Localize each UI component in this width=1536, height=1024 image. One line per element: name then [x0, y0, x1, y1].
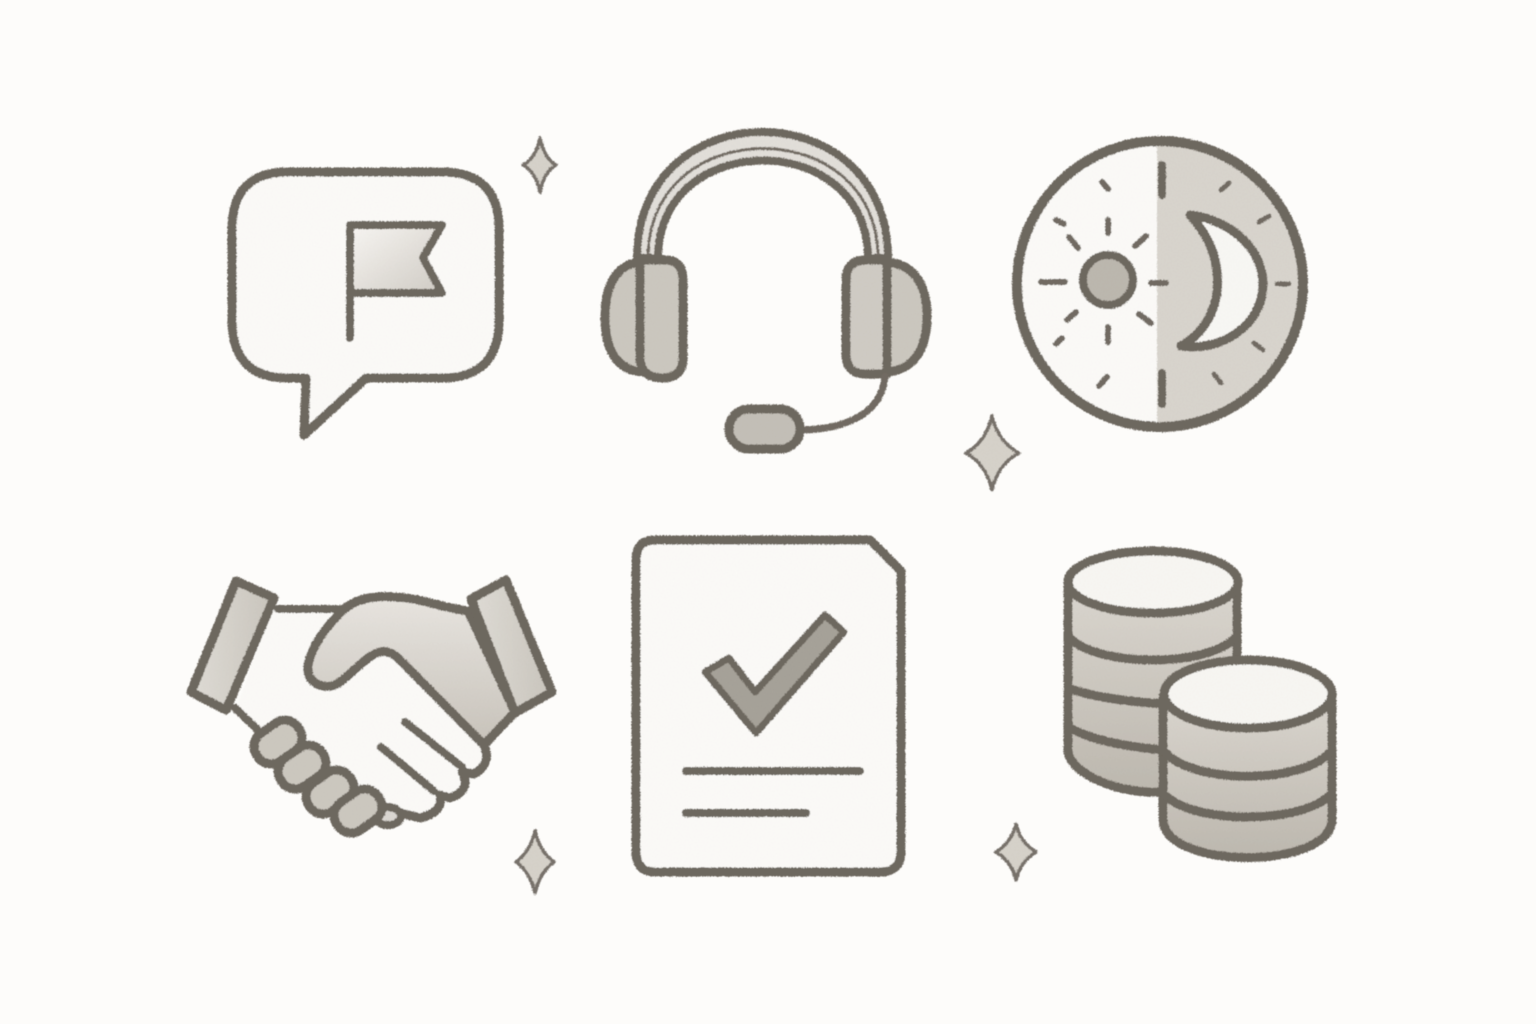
white fingers — [396, 742, 486, 818]
moon rays — [1214, 183, 1289, 383]
sun — [1041, 182, 1166, 386]
icon: sparkle top left — [523, 138, 556, 192]
mic boom — [804, 376, 885, 430]
checkmark — [705, 615, 844, 733]
right ear cup — [846, 260, 927, 374]
icon: speech bubble with flag — [232, 172, 499, 435]
icon: document with checkmark — [636, 540, 901, 872]
flag — [350, 225, 442, 338]
icon: headset — [605, 132, 927, 449]
text lines — [686, 771, 860, 813]
left stack — [1068, 551, 1238, 792]
icon: stacked coins — [1068, 551, 1332, 858]
fingers — [248, 714, 401, 839]
icon: sparkle bottom right — [996, 824, 1036, 880]
icon: day and night clock — [1017, 141, 1303, 427]
icon: sparkle center right — [966, 416, 1019, 490]
microphone — [729, 409, 800, 449]
left ear cup — [605, 260, 683, 378]
moon — [1181, 215, 1263, 347]
gray hand — [308, 597, 515, 745]
cuffs — [191, 581, 274, 710]
icon: sparkle bottom left — [516, 831, 554, 893]
icon: handshake — [191, 580, 552, 839]
right stack — [1163, 660, 1332, 858]
center ticks — [1158, 165, 1166, 404]
